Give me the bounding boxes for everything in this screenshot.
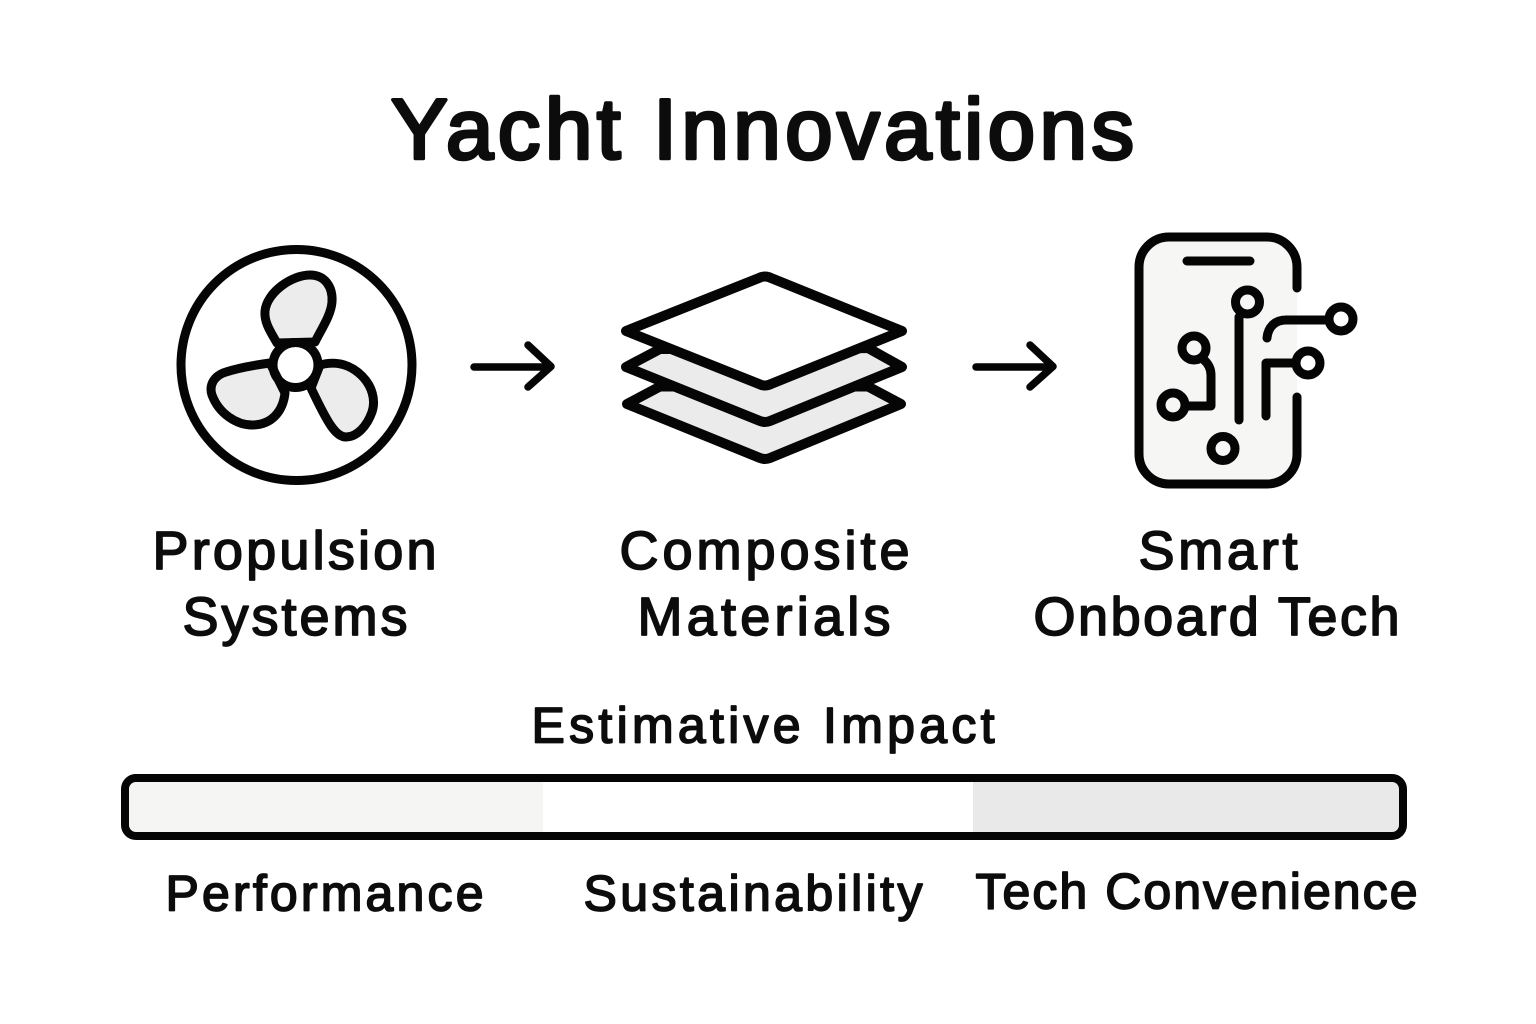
label: composite materials: Materials [638, 587, 890, 647]
label: smart onboard tech: Smart [1138, 521, 1298, 581]
label: smart onboard tech [1034, 521, 1400, 647]
title: Yacht Innovations [391, 82, 1134, 178]
arrow: composites to smart tech [976, 345, 1053, 387]
label: tech convenience: Tech Convenience [976, 864, 1418, 920]
label: propulsion systems: Propulsion [152, 521, 436, 581]
icon: propeller [181, 250, 412, 480]
label: propulsion systems: Systems [182, 587, 408, 647]
arrow: propulsion to composites [474, 345, 551, 387]
icon: smart phone circuit [1139, 237, 1353, 484]
label: composite materials: Composite [620, 521, 910, 581]
label: smart onboard tech: Onboard Tech [1034, 587, 1400, 647]
impact bar [125, 778, 1403, 836]
label: composite materials [620, 521, 910, 647]
label: sustainability: Sustainability [584, 866, 922, 922]
label: propulsion systems [152, 521, 436, 647]
label: performance: Performance [166, 866, 484, 922]
heading: estimative impact: Estimative Impact [532, 698, 995, 754]
icon: composite layers [626, 276, 902, 459]
